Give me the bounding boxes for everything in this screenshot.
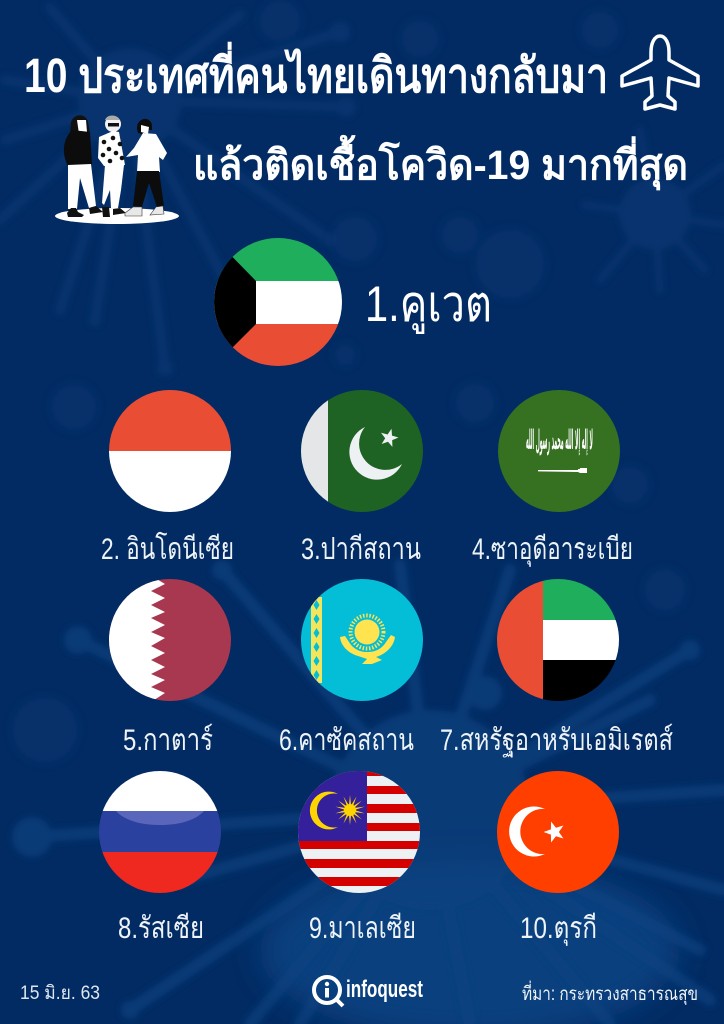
title [24, 41, 688, 191]
sun and eagle [340, 616, 395, 664]
ornament [311, 597, 322, 683]
flag: Qatar [109, 575, 231, 702]
illustration: three people [55, 115, 179, 224]
small viruses [13, 1, 685, 762]
flag: Indonesia [109, 390, 231, 512]
flag: UAE [497, 579, 620, 701]
label: Qatar: 5.กาตาร์ [123, 723, 213, 757]
flag: Kazakhstan [301, 579, 423, 701]
flag: Saudi Arabia [498, 390, 620, 512]
label: Saudi Arabia: 4.ซาอุดีอาระเบีย [472, 533, 633, 568]
label: Turkey: 10.ตุรกี [520, 912, 597, 947]
label: Russia: 8.รัสเซีย [118, 912, 204, 945]
label: Indonesia: 2. อินโดนีเซีย [101, 531, 234, 566]
flag: Russia [99, 771, 221, 893]
top-left virus [0, 8, 356, 376]
flag: Malaysia [298, 771, 420, 893]
label: Kuwait: 1.คูเวต [365, 276, 492, 334]
logo: infoquest [314, 976, 423, 1006]
flag: Turkey [497, 771, 619, 893]
label: Kazakhstan: 6.คาซัคสถาน [279, 724, 414, 757]
big virus at the bottom [12, 560, 724, 1024]
person left [64, 115, 103, 217]
flag: Pakistan [301, 390, 423, 512]
icon: airplane [622, 36, 698, 109]
logo: infoquest: infoquest [346, 976, 423, 1003]
person right [125, 119, 167, 216]
flag: Kuwait [214, 238, 342, 366]
title: แล้วติดเชื้อโควิด-19 มากที่สุด [193, 135, 688, 191]
label: Malaysia: 9.มาเลเซีย [309, 912, 416, 945]
person middle [98, 116, 126, 217]
label: Pakistan: 3.ปากีสถาน [301, 533, 421, 566]
top-right virus [585, 130, 724, 290]
title: 10 ประเทศที่คนไทยเดินทางกลับมา [24, 41, 608, 103]
date: 15 มิ.ย. 63 [20, 983, 100, 1004]
